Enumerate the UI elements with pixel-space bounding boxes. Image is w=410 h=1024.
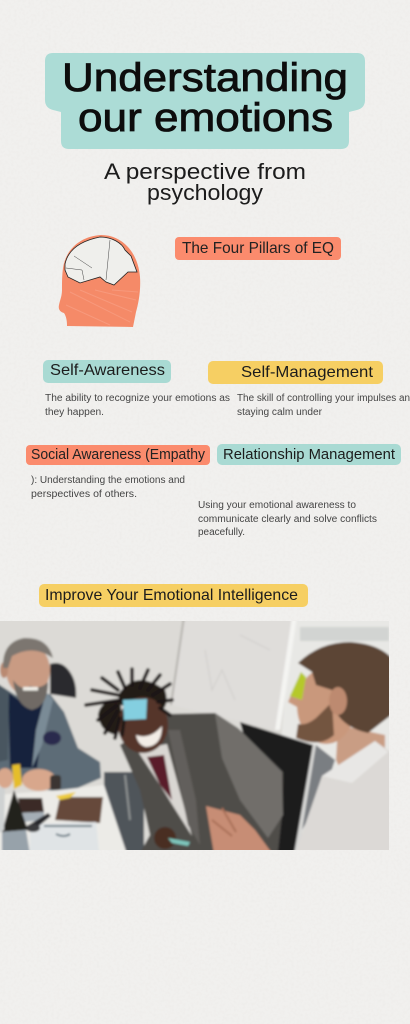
middle man head bbox=[98, 700, 122, 735]
pill: Self-Management: Self-Management bbox=[241, 364, 374, 381]
left man jacket bbox=[0, 682, 101, 794]
text: Relationship Management description: peacefully. bbox=[198, 527, 245, 538]
blue sticky note on forehead bbox=[123, 699, 147, 720]
right man bbox=[334, 726, 386, 766]
pill: Self-Awareness: Self-Awareness bbox=[50, 362, 165, 379]
chair bbox=[240, 722, 313, 860]
pill: Self-Management bbox=[208, 361, 383, 384]
text: Relationship Management description: communicate clearly and solve conflicts bbox=[198, 514, 377, 525]
title: our emotions bbox=[78, 96, 333, 140]
text: Self-Awareness description: they happen. bbox=[45, 407, 104, 418]
title: Understanding bbox=[62, 56, 348, 100]
text: Self-Management description: staying calm under bbox=[237, 407, 323, 418]
subtitle: psychology bbox=[147, 180, 263, 205]
text: Social Awareness description: perspectives of others. bbox=[31, 489, 137, 500]
subtitle bbox=[104, 159, 306, 205]
subtitle: A perspective from bbox=[104, 159, 306, 184]
icon: head with brain bbox=[59, 235, 140, 327]
text: Self-Awareness description: The ability to recognize your emotions as bbox=[45, 393, 230, 404]
heading pill: Improve Your Emotional Intelligence: Improve Your Emotional Intelligence bbox=[45, 587, 298, 604]
text: Self-Awareness description bbox=[45, 393, 230, 418]
text: Social Awareness description: ): Understanding the emotions and bbox=[31, 475, 185, 486]
text: Relationship Management description bbox=[198, 500, 377, 538]
table bbox=[0, 784, 128, 850]
text: Self-Management description bbox=[237, 393, 410, 418]
heading pill: The Four Pillars of EQ: The Four Pillars of EQ bbox=[182, 240, 334, 257]
chair behind left man bbox=[50, 663, 76, 698]
pill: Self-Awareness bbox=[43, 360, 171, 383]
title bbox=[45, 53, 365, 149]
pill: Social Awareness: Social Awareness (Empathy bbox=[31, 446, 205, 463]
left man hands bbox=[22, 769, 56, 791]
text: Self-Management description: The skill of controlling your impulses an bbox=[237, 393, 410, 404]
middle man jacket bbox=[120, 713, 283, 860]
gesturing hands bbox=[204, 804, 272, 850]
photo: colleagues laughing with sticky notes bbox=[0, 621, 389, 850]
pill: Relationship Management: Relationship Management bbox=[223, 446, 396, 463]
text: Social Awareness description bbox=[31, 475, 185, 500]
text: Relationship Management description: Using your emotional awareness to bbox=[198, 500, 356, 511]
